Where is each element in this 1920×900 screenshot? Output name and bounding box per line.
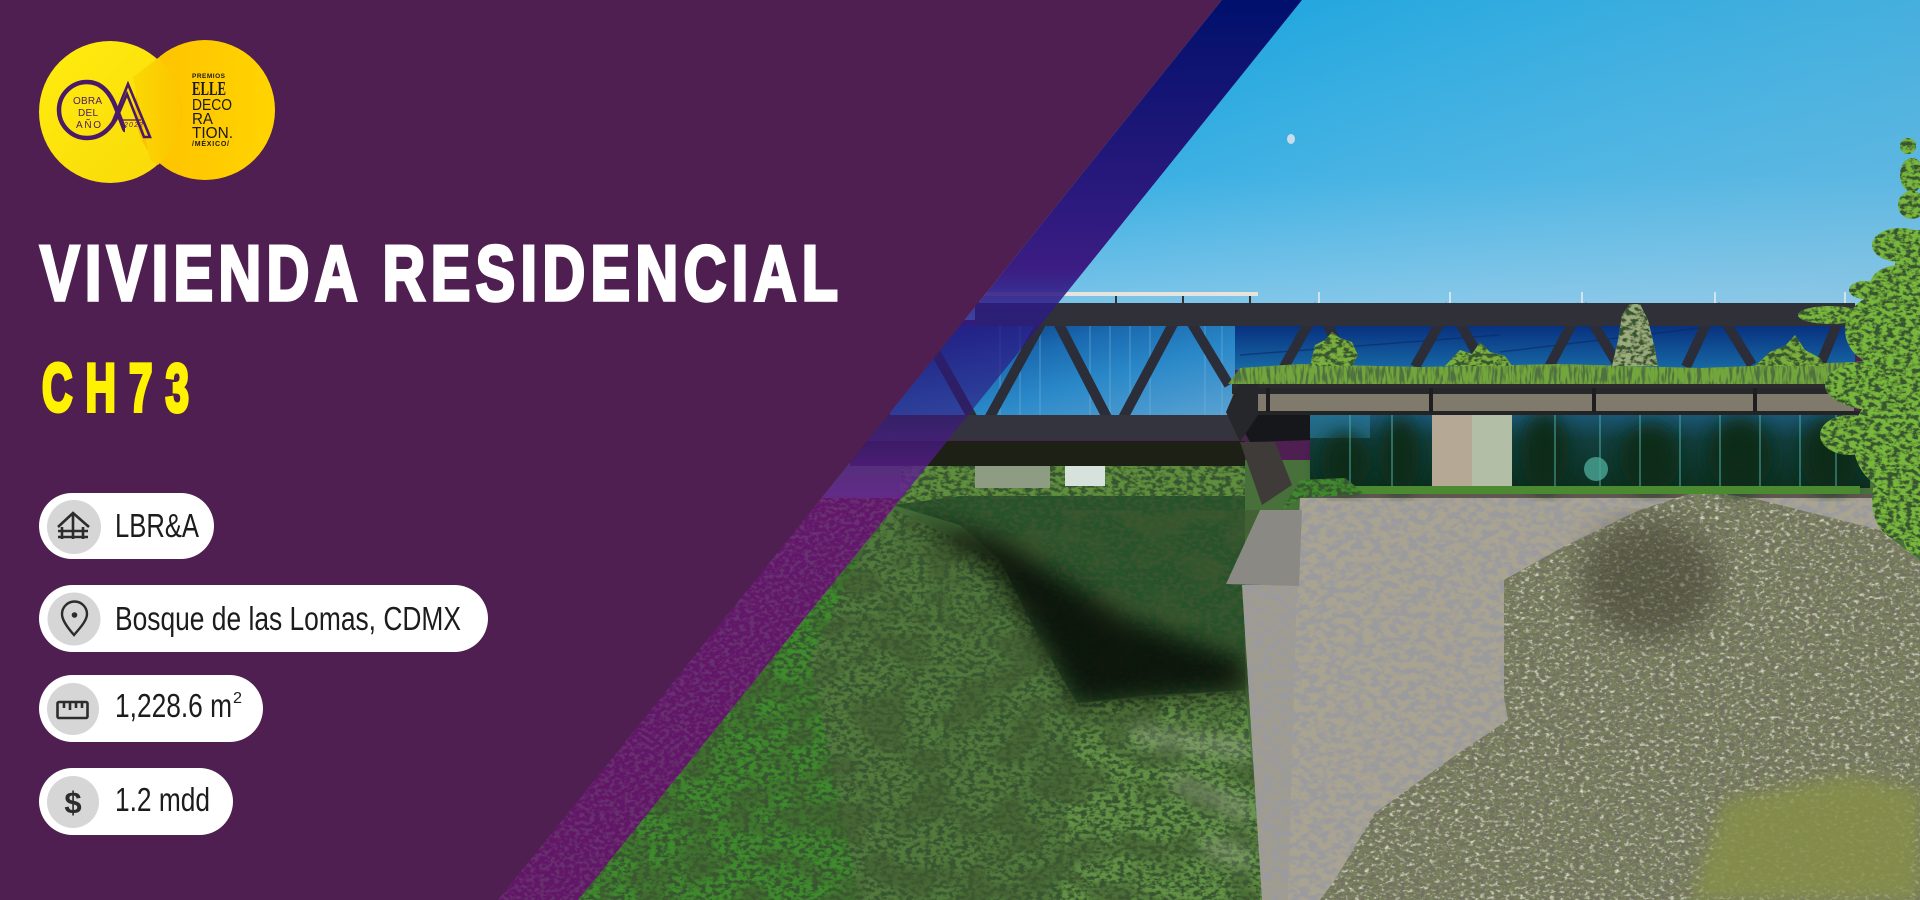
pill: architect: LBR&A	[115, 507, 199, 544]
top chord	[950, 292, 1855, 326]
Elle Decoration text: ELLE	[192, 78, 226, 100]
OA text: AÑO	[76, 118, 101, 131]
green roof	[1228, 362, 1855, 384]
pill: architect	[39, 493, 214, 559]
icon: map pin	[62, 602, 87, 635]
Elle Decoration text: RA	[192, 111, 213, 128]
pill: location: Bosque de las Lomas, CDMX	[115, 600, 461, 637]
logo: Obra del Año and Premios Elle Decoration	[39, 40, 275, 183]
Elle Decoration text: /MÉXICO/	[192, 139, 229, 148]
truss diagonals	[936, 305, 1845, 433]
OA text	[73, 96, 143, 131]
logo discs	[39, 40, 275, 183]
pill: area: 1,228.6 m	[115, 687, 232, 724]
pill: area: 2	[233, 690, 242, 707]
lower chord	[850, 415, 1312, 505]
Elle Decoration text: PREMIOS	[192, 73, 226, 80]
subtitle: CH73	[42, 350, 189, 425]
moon	[1287, 134, 1295, 144]
pill: area	[39, 675, 263, 742]
pill: budget: 1.2 mdd	[115, 781, 210, 818]
OA text: 2022	[123, 122, 143, 129]
OA monogram	[59, 82, 150, 138]
OA text: OBRA	[73, 96, 102, 107]
Elle Decoration text: DECO	[192, 97, 232, 114]
Elle Decoration text	[192, 73, 233, 148]
rooftop saplings	[1310, 304, 1825, 366]
icon: house structure	[58, 513, 89, 539]
band texture over lower vegetation	[498, 498, 901, 900]
concrete canopy	[1226, 510, 1302, 586]
OA text: DEL	[78, 108, 98, 119]
photo: house and garden	[480, 0, 1920, 900]
upper glazing	[890, 325, 1855, 415]
ground vegetation	[480, 460, 1920, 900]
retaining stone wall	[1242, 494, 1890, 900]
lower glazed room	[1282, 412, 1870, 510]
pill: location	[39, 585, 488, 652]
right shrubs	[1320, 490, 1920, 900]
translucent diagonal band	[498, 0, 1302, 900]
right tree	[1798, 138, 1920, 555]
purple panel	[0, 0, 1222, 900]
sky	[900, 0, 1920, 320]
icon: dollar: $	[64, 785, 82, 820]
icon: ruler	[58, 702, 88, 718]
Elle Decoration text: TION.	[192, 125, 233, 142]
eave beam	[1226, 384, 1864, 442]
pill: budget	[39, 768, 233, 835]
title: VIVIENDA RESIDENCIAL	[40, 229, 838, 317]
